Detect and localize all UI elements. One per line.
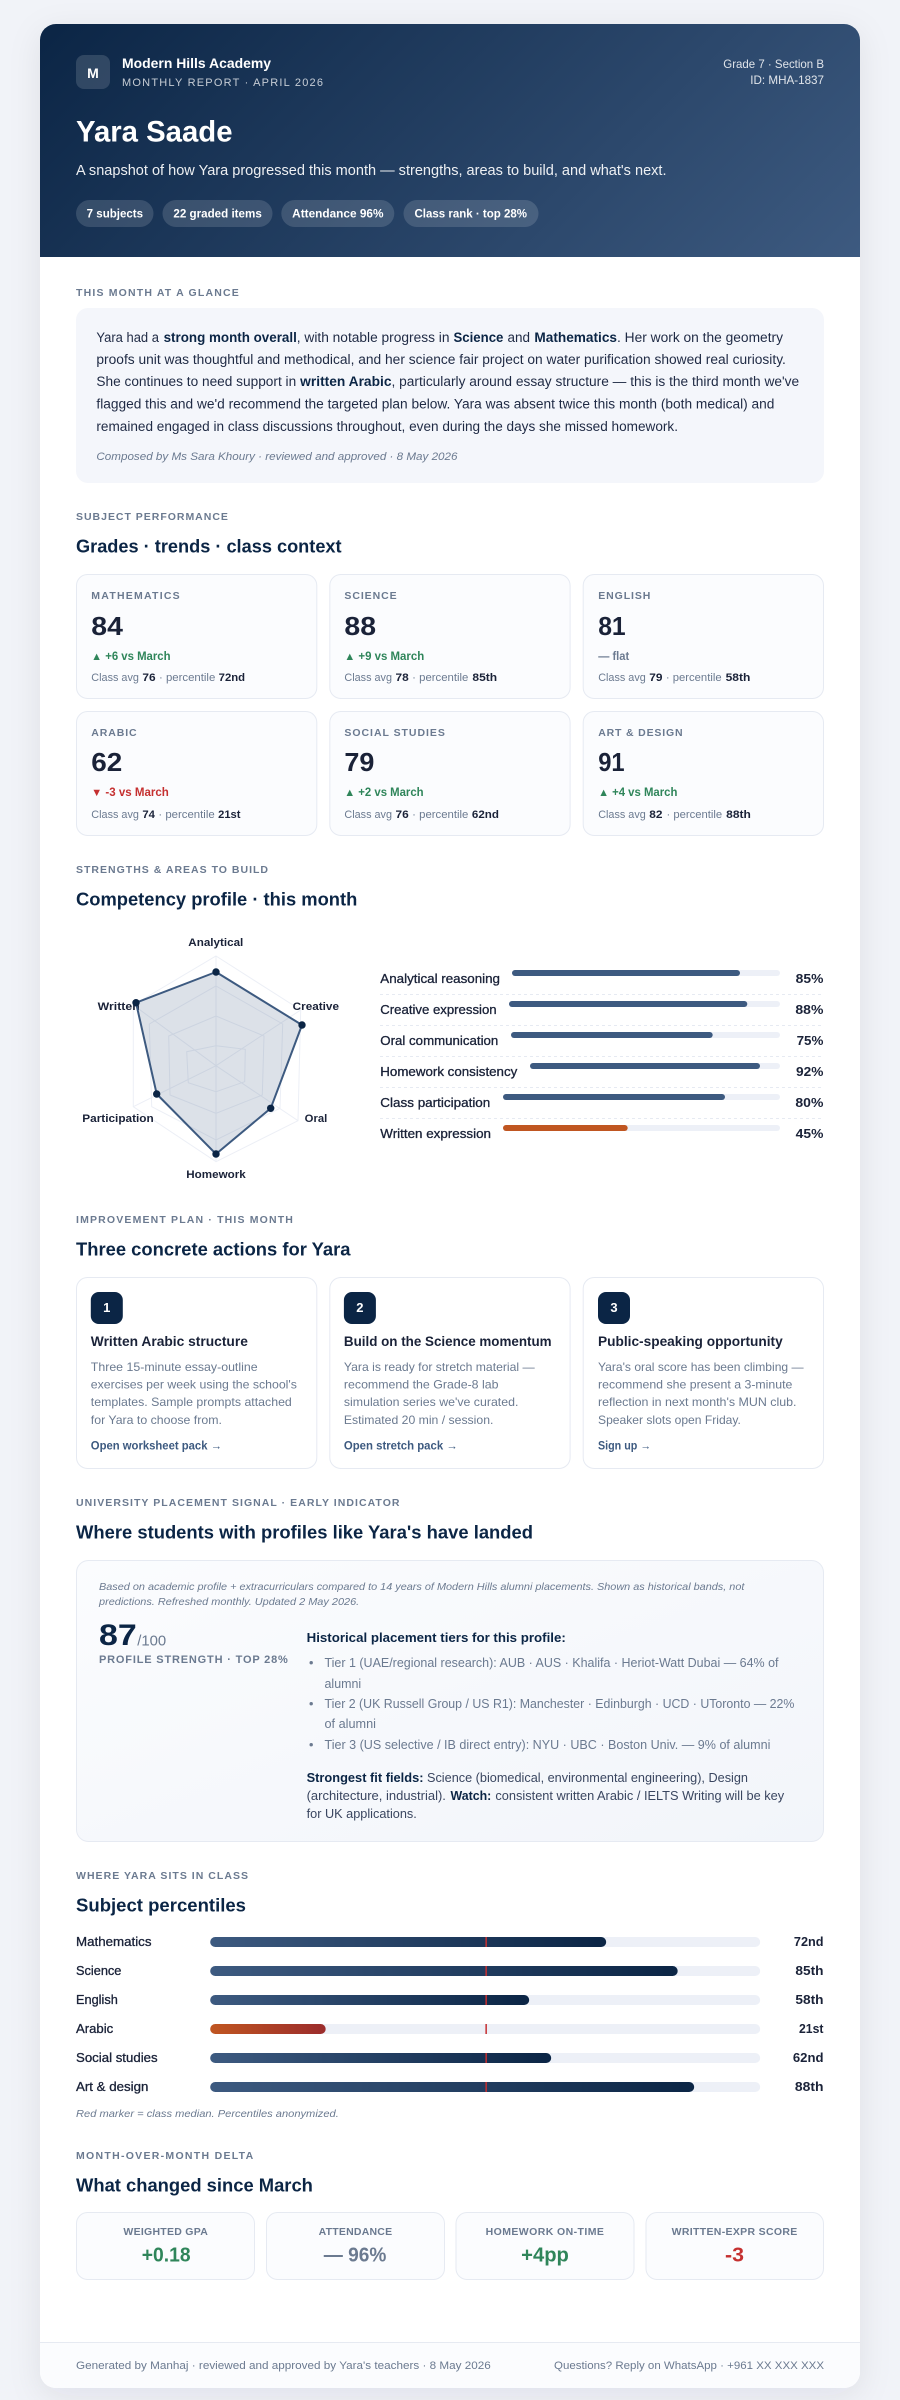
percentile bar: art and design: [76, 2080, 824, 2094]
subject card: mathematics: ▲ +6 vs March: [91, 651, 170, 663]
header banner: [40, 24, 860, 257]
stat card: attendance: [266, 2212, 444, 2280]
section label: IMPROVEMENT PLAN · THIS MONTH: [76, 1214, 293, 1226]
subject card: arabic: ARABIC: [91, 727, 137, 739]
pill: graded items: 22 graded items: [173, 208, 262, 220]
bar: homework consistency: Homework consistency: [380, 1065, 518, 1079]
section label: MONTH-OVER-MONTH DELTA: [76, 2150, 254, 2162]
subject card: english: 58th: [726, 672, 751, 684]
stat card: homework on-time: +4pp: [521, 2244, 569, 2266]
section heading: Where students with profiles like Yara's have landed: [76, 1522, 533, 1542]
subject card: mathematics: 84: [91, 611, 123, 641]
subject card: arabic: 62: [91, 747, 122, 777]
action card 2: recommend the Grade-8 lab: [344, 1378, 499, 1392]
percentile bar: arabic: Arabic: [76, 2022, 113, 2036]
bar: class participation: [380, 1094, 823, 1110]
bar: creative expression: 88%: [795, 1003, 823, 1017]
bar: analytical reasoning: [380, 970, 823, 986]
bar: oral communication: [380, 1032, 823, 1048]
bar: creative expression: Creative expression: [380, 1003, 497, 1017]
percentile bar: social studies: Social studies: [76, 2051, 158, 2065]
section: month at a glance: [76, 287, 824, 483]
percentile bar: art and design: 88th: [795, 2080, 824, 2094]
school name: Modern Hills Academy: [122, 55, 271, 71]
pill: class rank: Class rank · top 28%: [414, 208, 527, 220]
percentile bar: art and design: Art & design: [76, 2080, 148, 2094]
subject card: science: Class avg: [344, 672, 392, 684]
subject card: science: 88: [344, 611, 376, 641]
percentile bar: arabic: 21st: [799, 2022, 824, 2036]
strongest fit fields: for UK applications.: [307, 1807, 417, 1821]
section label: SUBJECT PERFORMANCE: [76, 511, 228, 523]
summary panel: [76, 308, 824, 483]
summary panel: remained engaged in class discussions throughout, even during the days she missed homework.: [96, 419, 678, 434]
bar: creative expression: [380, 1001, 823, 1017]
section heading: Subject percentiles: [76, 1894, 246, 1916]
subject card: english: 79: [649, 672, 662, 684]
section heading: Three concrete actions for Yara: [76, 1238, 351, 1260]
methodology note: predictions. Refreshed monthly. Updated 2 May 2026.: [98, 1596, 359, 1608]
summary panel: She continues to need support in: [96, 374, 296, 389]
section: university placement: [76, 1497, 824, 1842]
section label: THIS MONTH AT A GLANCE: [76, 287, 239, 299]
action card 1: exercises per week using the school's: [91, 1378, 297, 1392]
footer contact: Questions? Reply on WhatsApp · +961 XX XXX XXX: [554, 2360, 825, 2372]
subject card: english: — flat: [598, 651, 629, 663]
placement tiers: [307, 1631, 794, 1752]
stat card: homework on-time: [456, 2212, 634, 2280]
stat card: written-expression score: -3: [725, 2244, 744, 2266]
stat card: weighted gpa: [76, 2212, 254, 2280]
competency bars: [380, 970, 824, 1141]
subject card: social studies: Class avg: [344, 809, 392, 821]
subject card: english: Class avg: [598, 672, 646, 684]
subject card: social studies: ▲ +2 vs March: [344, 787, 424, 799]
student id: ID: MHA-1837: [750, 73, 824, 87]
bar: oral communication: Oral communication: [380, 1034, 498, 1048]
attribution: Composed by Ms Sara Khoury · reviewed and approved · 8 May 2026: [96, 451, 458, 463]
subject card: arabic: ▼ -3 vs March: [91, 787, 169, 799]
action card 3: recommend she present a 3-minute: [598, 1378, 793, 1392]
action card 3: Sign up →: [598, 1440, 651, 1452]
action card 1: Open worksheet pack →: [91, 1440, 222, 1452]
section: subject performance: [76, 511, 824, 836]
section: subject percentiles: [76, 1870, 824, 2120]
summary panel: Science: [454, 330, 504, 345]
subject card: science: ▲ +9 vs March: [344, 651, 424, 663]
subject card: mathematics: 76: [142, 672, 156, 684]
bar: written expression: 45%: [796, 1127, 823, 1141]
subject card: art and design: ▲ +4 vs March: [598, 787, 677, 799]
percentile bar: science: Science: [76, 1964, 121, 1978]
bar: written expression: [380, 1125, 823, 1141]
placement tiers: Tier 3 (US selective / IB direct entry): NYU · UBC · Boston Univ. — 9% of alumni: [324, 1738, 770, 1752]
subject card: mathematics: Class avg: [91, 672, 139, 684]
subject card: arabic: · percentile: [158, 809, 215, 821]
subject card: art and design: ART & DESIGN: [598, 727, 683, 739]
subject card: social studies: 79: [344, 747, 374, 777]
bar: oral communication: 75%: [797, 1034, 823, 1048]
summary panel: Mathematics: [534, 330, 617, 345]
subject card: social studies: SOCIAL STUDIES: [344, 727, 445, 739]
bar: analytical reasoning: 85%: [796, 972, 823, 986]
stat card: written-expression score: WRITTEN-EXPR SCORE: [672, 2226, 797, 2238]
percentile bar: mathematics: Mathematics: [76, 1935, 152, 1949]
section label: WHERE YARA SITS IN CLASS: [76, 1870, 248, 1882]
section heading: Competency profile · this month: [76, 888, 357, 910]
grade and section: Grade 7 · Section B: [723, 57, 824, 71]
profile score: 87: [99, 1619, 137, 1652]
subject card: art and design: 91: [598, 747, 625, 777]
icon: school logo: M: [87, 65, 99, 81]
stat card: written-expression score: [646, 2212, 824, 2280]
subject card: science: [330, 574, 570, 698]
profile score: /100: [137, 1632, 166, 1649]
percentile bar: english: [76, 1993, 824, 2007]
subject card: arabic: Class avg: [91, 809, 139, 821]
section heading: What changed since March: [76, 2174, 313, 2196]
action card 2: [330, 1278, 570, 1468]
stat card: weighted gpa: WEIGHTED GPA: [123, 2226, 208, 2238]
stat card: attendance: — 96%: [324, 2244, 387, 2266]
subject card: mathematics: [76, 574, 317, 698]
subject card: arabic: 21st: [218, 809, 241, 821]
bar: class participation: Class participation: [380, 1096, 490, 1110]
action card 1: 1: [103, 1300, 110, 1315]
action card 1: [76, 1278, 317, 1468]
placement tiers: Tier 1 (UAE/regional research): AUB · AUS · Khalifa · Heriot-Watt Dubai — 64% of: [324, 1656, 779, 1670]
percentile bar: arabic: [76, 2022, 824, 2036]
strongest fit fields: Watch:: [450, 1789, 491, 1803]
report subtitle: MONTHLY REPORT · APRIL 2026: [122, 77, 323, 89]
subject card: english: [583, 574, 824, 698]
subject card: arabic: 74: [142, 809, 156, 821]
action card 3: 3: [610, 1300, 618, 1315]
subject card: science: · percentile: [412, 672, 468, 684]
subject card: mathematics: 72nd: [219, 672, 245, 684]
action card 3: Yara's oral score has been climbing —: [598, 1360, 804, 1374]
pill: class rank: [404, 200, 538, 227]
student name: Yara Saade: [76, 116, 232, 148]
summary panel: and: [508, 330, 530, 345]
subject card: social studies: 62nd: [472, 809, 499, 821]
radar chart: Written: [98, 1001, 140, 1013]
radar chart: Analytical: [188, 937, 243, 949]
stat card: weighted gpa: +0.18: [142, 2244, 191, 2266]
placement tiers: of alumni: [324, 1717, 376, 1731]
radar chart: [82, 937, 339, 1181]
action card 3: [583, 1278, 824, 1468]
radar chart: Participation: [82, 1113, 154, 1125]
subject card: science: SCIENCE: [344, 590, 397, 602]
methodology note: [98, 1581, 746, 1608]
action card 2: Estimated 20 min / session.: [344, 1413, 493, 1427]
summary panel: written Arabic: [299, 374, 392, 389]
summary panel: flagged this and we'd recommend the targeted plan below. Yara was absent twice this month (both medical) and: [96, 396, 774, 412]
percentile bar: mathematics: 72nd: [794, 1935, 824, 1949]
subject card: art and design: · percentile: [666, 809, 722, 821]
percentile bar: science: 85th: [795, 1964, 824, 1978]
bar: class participation: 80%: [795, 1096, 823, 1110]
bar: written expression: Written expression: [380, 1127, 491, 1141]
action card 2: Open stretch pack →: [344, 1440, 458, 1452]
action card 3: Public-speaking opportunity: [598, 1334, 783, 1349]
subject card: mathematics: · percentile: [159, 672, 215, 684]
action card 2: 2: [356, 1300, 364, 1315]
section heading: Grades · trends · class context: [76, 536, 342, 556]
subject card: social studies: · percentile: [412, 809, 468, 821]
subject card: english: ENGLISH: [598, 590, 650, 602]
footer: [40, 2342, 860, 2388]
percentile bar: social studies: [76, 2051, 824, 2065]
bar: homework consistency: [380, 1063, 823, 1079]
footer credit: Generated by Manhaj · reviewed and approved by Yara's teachers · 8 May 2026: [76, 2360, 491, 2372]
summary panel: Yara had a: [96, 330, 159, 345]
pill: graded items: [162, 200, 272, 227]
pill: attendance: Attendance 96%: [292, 208, 384, 220]
action card 2: Build on the Science momentum: [344, 1334, 552, 1349]
strongest fit fields: consistent written Arabic / IELTS Writing will be key: [495, 1789, 785, 1803]
action card 1: templates. Sample prompts attached: [91, 1395, 292, 1409]
section label: STRENGTHS & AREAS TO BUILD: [76, 864, 268, 876]
pill: subjects: [76, 200, 154, 227]
subject card: art and design: [583, 712, 824, 836]
section: competency profile: [76, 864, 824, 1181]
action card 3: Speaker slots open Friday.: [598, 1413, 741, 1427]
radar chart: Creative: [293, 1001, 339, 1013]
placement panel: [76, 1560, 824, 1842]
action card 1: for Yara to choose from.: [91, 1413, 222, 1427]
radar chart: Oral: [305, 1113, 327, 1125]
action card 2: Yara is ready for stretch material —: [344, 1360, 535, 1374]
summary panel: proofs unit was thoughtful and methodical, and her science fair project on water purification showed real curiosity.: [96, 352, 786, 367]
subject card: art and design: Class avg: [598, 809, 646, 821]
subject card: science: 85th: [472, 672, 497, 684]
strongest fit fields: Science (biomedical, environmental engineering), Design: [427, 1771, 748, 1785]
percentile bar: science: [76, 1964, 824, 1978]
methodology note: Based on academic profile + extracurriculars compared to 14 years of Modern Hills alumni placements. Shown as historical bands, not: [99, 1581, 746, 1593]
profile score: [99, 1619, 288, 1666]
stat card: homework on-time: HOMEWORK ON-TIME: [486, 2226, 604, 2238]
subject card: english: 81: [598, 611, 626, 641]
pill: subjects: 7 subjects: [87, 208, 143, 220]
action card 1: Three 15-minute essay-outline: [91, 1360, 258, 1374]
summary panel: , particularly around essay structure — this is the third month we've: [392, 374, 799, 389]
subject card: art and design: 82: [649, 809, 662, 821]
strongest fit fields: [307, 1771, 785, 1821]
summary panel: strong month overall: [164, 330, 297, 345]
radar chart: Homework: [186, 1169, 247, 1181]
percentile bar: english: 58th: [795, 1993, 824, 2007]
subject card: art and design: 88th: [726, 809, 751, 821]
action card 3: reflection in next month's MUN club.: [598, 1395, 796, 1409]
action card 2: simulation series we've curated.: [344, 1395, 518, 1409]
stat card: attendance: ATTENDANCE: [319, 2226, 392, 2238]
header summary: A snapshot of how Yara progressed this month — strengths, areas to build, and what's next.: [76, 163, 666, 179]
section: improvement plan: [76, 1214, 824, 1468]
bar: homework consistency: 92%: [796, 1065, 823, 1079]
subject card: social studies: 76: [396, 809, 409, 821]
subject card: arabic: [76, 712, 317, 836]
action card 1: Written Arabic structure: [91, 1334, 248, 1349]
percentile bar: mathematics: [76, 1935, 824, 1949]
percentile bar: english: English: [76, 1993, 118, 2007]
chart footnote: Red marker = class median. Percentiles anonymized.: [76, 2108, 339, 2120]
subject card: science: 78: [396, 672, 409, 684]
summary panel: . Her work on the geometry: [617, 330, 783, 345]
subject card: mathematics: MATHEMATICS: [91, 590, 180, 602]
placement tiers: Historical placement tiers for this profile:: [307, 1631, 566, 1645]
strongest fit fields: Strongest fit fields:: [307, 1771, 424, 1785]
pill: attendance: [281, 200, 394, 227]
placement tiers: alumni: [324, 1677, 361, 1691]
profile score: PROFILE STRENGTH · TOP 28%: [99, 1654, 288, 1666]
summary panel: , with notable progress in: [297, 330, 450, 345]
icon: school logo: [76, 55, 110, 89]
percentile bar: social studies: 62nd: [793, 2051, 824, 2065]
placement tiers: Tier 2 (UK Russell Group / US R1): Manchester · Edinburgh · UCD · UToronto — 22%: [324, 1697, 794, 1711]
section: month-over-month delta: [76, 2150, 824, 2280]
section label: UNIVERSITY PLACEMENT SIGNAL · EARLY INDICATOR: [76, 1497, 400, 1509]
subject card: english: · percentile: [666, 672, 722, 684]
subject card: social studies: [330, 712, 570, 836]
strongest fit fields: (architecture, industrial).: [307, 1789, 446, 1803]
bar: analytical reasoning: Analytical reasoning: [380, 972, 500, 986]
